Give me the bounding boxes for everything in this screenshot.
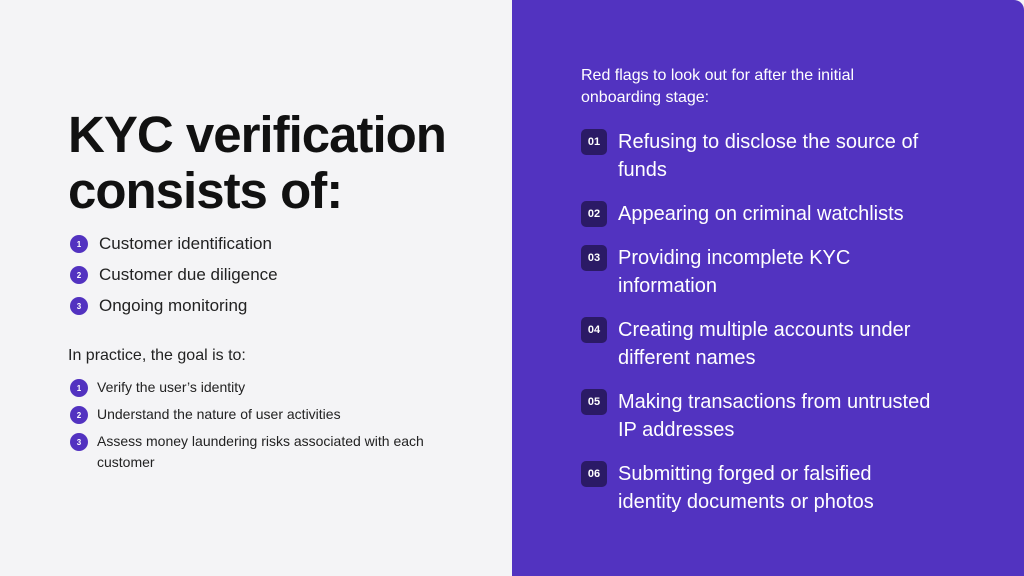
flag 05: Making transactions from untrusted	[618, 391, 930, 413]
flag 03: 03	[588, 252, 600, 264]
item 2: Customer due diligence	[99, 265, 278, 284]
flag 01: 01	[588, 136, 600, 148]
flag 03: information	[618, 275, 717, 297]
flag 04: different names	[618, 347, 756, 369]
red flags heading: onboarding stage:	[581, 89, 709, 106]
flag 01: Refusing to disclose the source of	[618, 131, 918, 153]
item 3: Ongoing monitoring	[99, 296, 247, 315]
flag 03	[581, 245, 850, 297]
flag 06	[581, 461, 874, 513]
flag 04: Creating multiple accounts under	[618, 319, 910, 341]
goal 1: 1	[77, 384, 81, 392]
title: consists of:	[68, 162, 342, 219]
panel: red flags	[512, 0, 1024, 576]
flag 04	[581, 317, 910, 369]
flag 05: 05	[588, 396, 600, 408]
item 1: Customer identification	[99, 234, 272, 253]
flag 04: 04	[588, 324, 600, 336]
title: KYC verification	[68, 106, 446, 163]
item 1: 1	[77, 240, 81, 248]
red flags heading: Red flags to look out for after the initial	[581, 67, 854, 84]
flag 02: Appearing on criminal watchlists	[618, 203, 904, 225]
goal 1: Verify the user’s identity	[97, 379, 245, 395]
flag 06: 06	[588, 468, 600, 480]
flag 01	[581, 129, 918, 181]
red flags heading	[581, 67, 854, 106]
flag 06: identity documents or photos	[618, 491, 874, 513]
item 3: 3	[77, 302, 81, 310]
goal 2: 2	[77, 410, 81, 420]
flag 03: Providing incomplete KYC	[618, 247, 850, 269]
list: goals	[70, 379, 424, 470]
red flag list	[581, 129, 930, 513]
item 2: 2	[77, 270, 81, 280]
flag 05: IP addresses	[618, 419, 734, 441]
flag 01: funds	[618, 159, 667, 181]
title	[68, 106, 446, 219]
flag 02: 02	[588, 208, 600, 220]
goal 3: 3	[77, 438, 81, 446]
flag 06: Submitting forged or falsified	[618, 463, 871, 485]
flag 05	[581, 389, 930, 441]
goal 3: Assess money laundering risks associated with each customer	[97, 433, 424, 470]
subheading: In practice, the goal is to:	[68, 347, 246, 364]
goal 2: Understand the nature of user activities	[97, 406, 341, 422]
list: components	[70, 234, 278, 315]
